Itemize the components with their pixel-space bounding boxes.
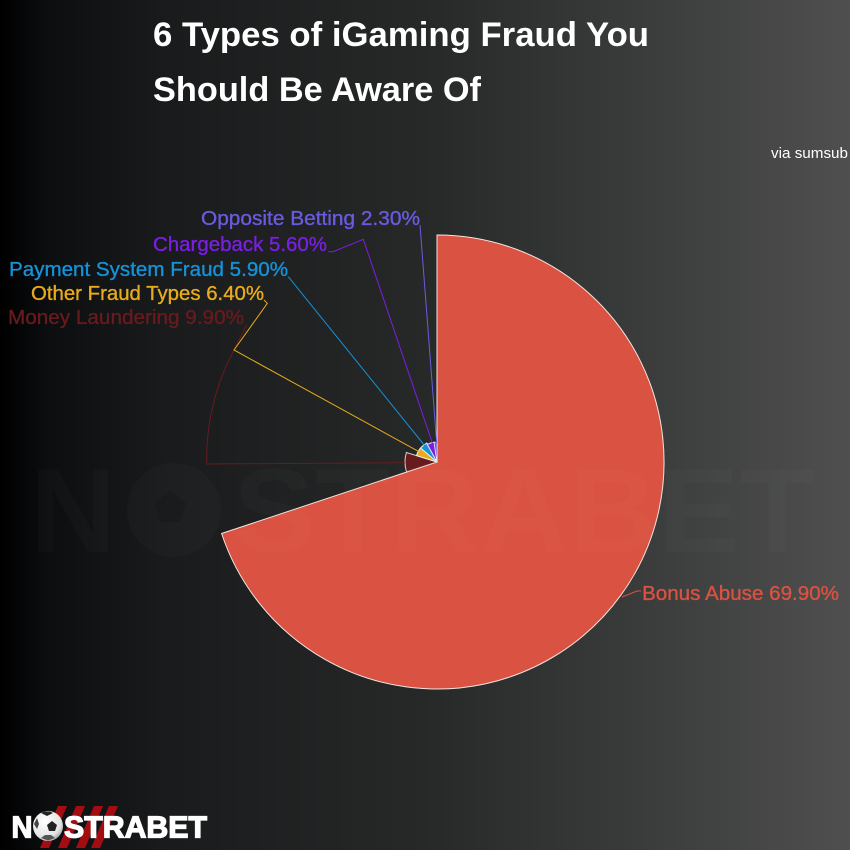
label: Payment System Fraud: Payment System Fraud 5.90% — [9, 258, 288, 281]
slice: Money Laundering — [405, 452, 437, 472]
icon: soccer ball — [33, 811, 63, 841]
source note: via sumsub — [771, 146, 848, 162]
leader line: Bonus Abuse — [622, 591, 641, 597]
pie chart — [222, 235, 664, 689]
leader line: Other Fraud Types — [234, 300, 419, 452]
watermark: N — [30, 444, 116, 578]
leader line: Money Laundering — [207, 325, 405, 464]
label: Chargeback: Chargeback 5.60% — [153, 233, 327, 256]
logo wordmark: STRABET — [64, 810, 207, 844]
logo: Nostrabet — [12, 806, 207, 848]
slice: Chargeback — [427, 442, 437, 462]
chart labels — [8, 207, 839, 605]
title: Should Be Aware Of — [153, 71, 482, 109]
slice: Other Fraud Types — [416, 448, 437, 462]
leader line: Payment System Fraud — [288, 277, 425, 446]
watermark: STRABET — [233, 444, 815, 578]
logo stripes — [40, 806, 118, 848]
leader line: Opposite Betting — [420, 225, 437, 443]
slice: Payment System Fraud — [421, 443, 437, 462]
leader line: Chargeback — [328, 239, 433, 444]
slice: Bonus Abuse — [222, 235, 664, 689]
title — [153, 16, 649, 109]
label: Money Laundering: Money Laundering 9.90% — [8, 306, 244, 329]
slice: Opposite Betting — [434, 442, 437, 462]
title: 6 Types of iGaming Fraud You — [153, 16, 649, 54]
logo wordmark: N — [12, 810, 32, 844]
label: Bonus Abuse: Bonus Abuse 69.90% — [642, 582, 839, 605]
label: Opposite Betting: Opposite Betting 2.30% — [201, 207, 420, 230]
label: Other Fraud Types: Other Fraud Types 6.40% — [31, 282, 264, 305]
